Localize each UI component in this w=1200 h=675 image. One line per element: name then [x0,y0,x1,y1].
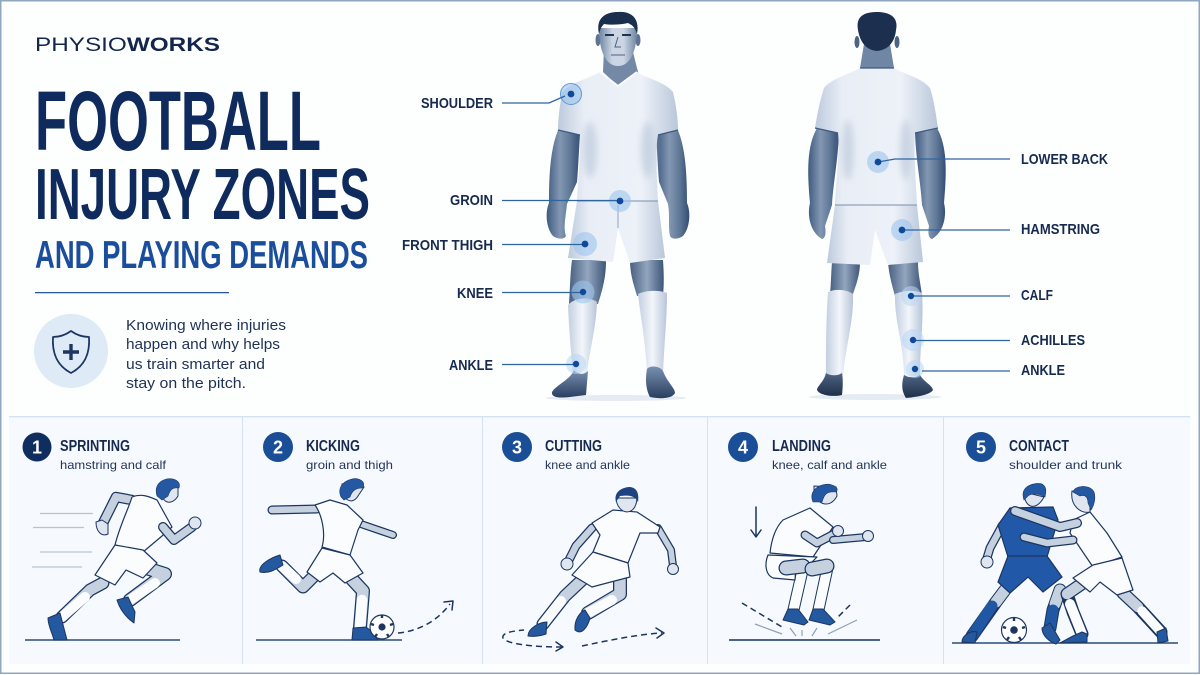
title: INJURY ZONES [35,155,370,235]
cutting player illustration [503,487,678,651]
heading: kicking [306,438,393,472]
number badge 2: 2 [273,438,283,458]
heading: contact: shoulder and trunk [1009,458,1123,472]
marker: shoulder [421,84,582,112]
playing demands strip background [9,417,1190,664]
landing player illustration [729,484,880,640]
title [35,74,370,277]
white player [1015,486,1168,643]
two players contesting illustration [952,483,1178,644]
front view player [546,12,689,401]
intro text: us train smarter and [126,356,265,373]
back view player [808,12,946,400]
marker: hamstring: HAMSTRING [1021,221,1100,238]
heading: sprinting: hamstring and calf [60,458,167,472]
heading: landing: LANDING [772,438,831,455]
number badge 4 [728,432,758,462]
panel: contact [952,432,1178,644]
heading: landing: knee, calf and ankle [772,458,887,472]
heading: cutting: knee and ankle [545,458,630,472]
blue player [962,483,1062,644]
panel: cutting [502,432,678,651]
marker: back ankle [906,360,1065,379]
number badge 5: 5 [976,438,986,458]
heading: contact [1009,438,1123,472]
ball path arrow [398,601,453,633]
marker: calf [901,286,1053,306]
marker: front ankle [449,354,586,374]
marker: front ankle: ANKLE [449,357,493,374]
icon: shield with medical cross [34,314,108,388]
panel: kicking [256,432,453,640]
heading: kicking: KICKING [306,438,360,455]
heading: kicking: groin and thigh [306,458,393,472]
number badge 2 [263,432,293,462]
intro text: happen and why helps [126,336,280,353]
heading: landing [772,438,887,472]
marker: back ankle: ANKLE [1021,362,1065,379]
number badge 4: 4 [738,438,748,458]
heading: sprinting: SPRINTING [60,438,130,455]
number badge 3 [502,432,532,462]
marker: hamstring [891,219,1100,241]
sprinter illustration [25,479,201,640]
panel: sprinting [22,432,201,640]
intro text [126,317,286,392]
arrow: downward [751,507,761,537]
football [370,615,394,639]
heading: sprinting [60,438,167,472]
intro text: Knowing where injuries [126,317,286,334]
speed lines [32,514,93,567]
marker: groin [450,190,631,212]
title: AND PLAYING DEMANDS [35,234,368,277]
kicker illustration [256,479,453,640]
marker: knee: KNEE [457,285,493,302]
football [1002,618,1026,642]
cutting path arrows [503,628,664,651]
marker: calf: CALF [1021,287,1053,304]
heading: cutting [545,438,630,472]
marker: groin: GROIN [450,192,493,209]
marker: shoulder: SHOULDER [421,95,493,112]
number badge 5 [966,432,996,462]
brand logo: PHYSIO WORKS [35,34,220,56]
marker: achilles [902,329,1085,351]
marker: front thigh: FRONT THIGH [402,237,493,254]
marker: lower back [867,151,1108,173]
marker: knee [457,280,594,304]
heading: cutting: CUTTING [545,438,602,455]
marker: front thigh [402,232,597,256]
title: FOOTBALL [35,74,321,168]
number badge 1: 1 [32,438,42,458]
number badge 3: 3 [512,438,522,458]
marker: achilles: ACHILLES [1021,332,1085,349]
number badge 1 [22,432,52,462]
intro text: stay on the pitch. [126,375,246,392]
heading: contact: CONTACT [1009,438,1069,455]
panel: landing [728,432,887,640]
marker: lower back: LOWER BACK [1021,151,1108,168]
